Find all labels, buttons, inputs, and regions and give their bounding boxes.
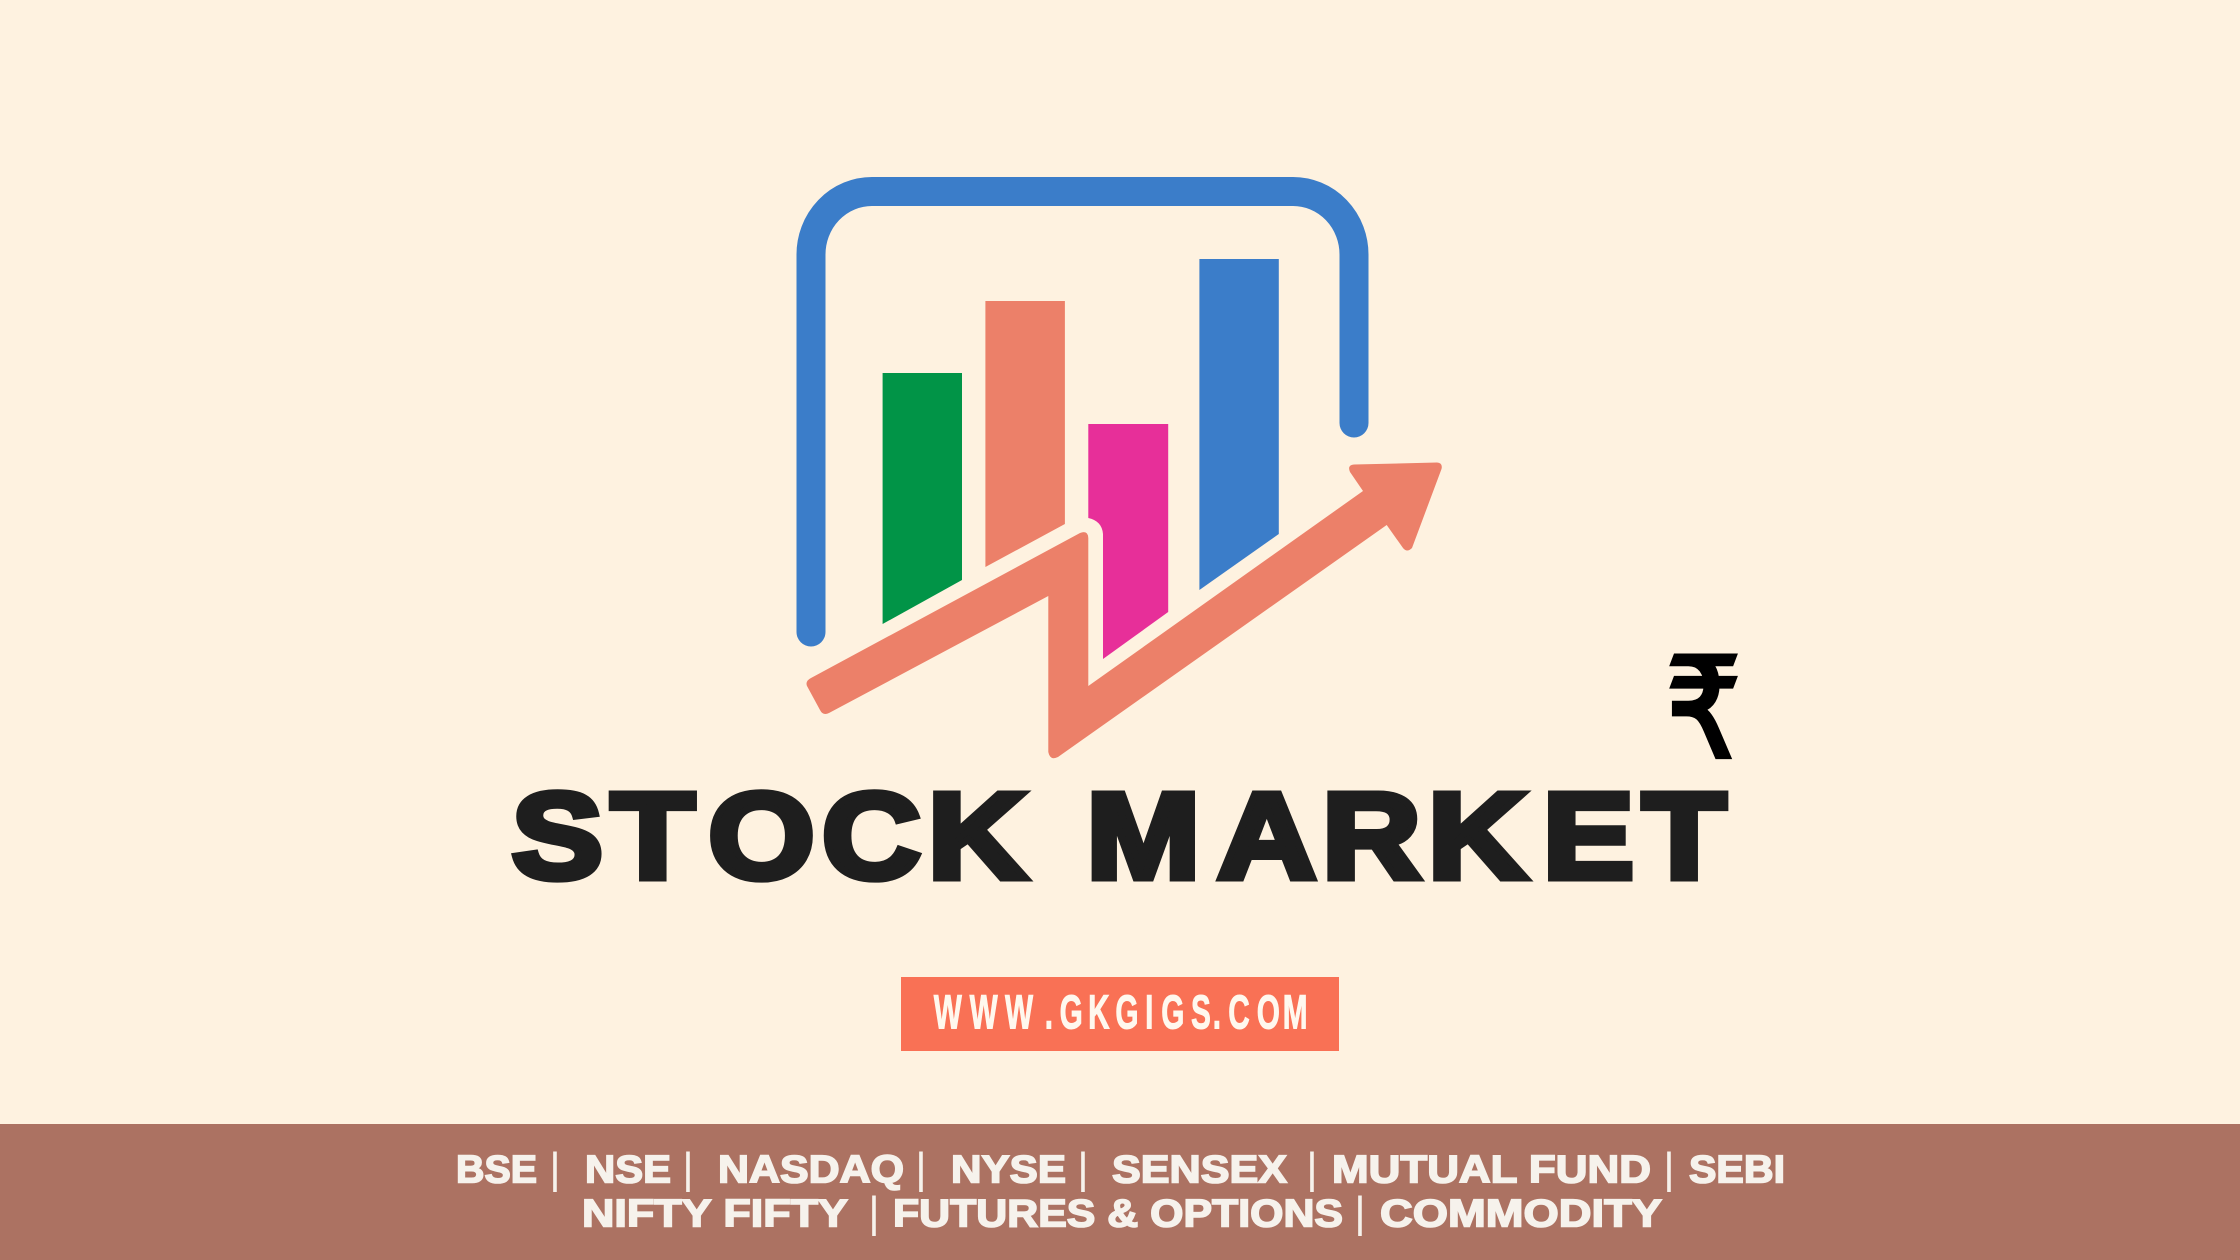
footer keywords line 1: MUTUAL FUND	[1332, 1148, 1651, 1192]
footer band	[0, 1124, 2240, 1260]
footer keywords line 1: BSE	[456, 1148, 537, 1192]
bar: pink	[1088, 424, 1168, 659]
footer keywords line 2: |	[868, 1188, 880, 1237]
footer keywords line 1: NASDAQ	[718, 1148, 904, 1192]
footer keywords line 2: NIFTY FIFTY	[582, 1192, 848, 1236]
footer keywords line 2: COMMODITY	[1380, 1192, 1662, 1236]
frame: rounded blue outline	[811, 191, 1354, 632]
arrow: rising zigzag	[806, 462, 1442, 758]
footer keywords line 2: FUTURES & OPTIONS	[893, 1192, 1343, 1236]
footer keywords line 1: |	[1077, 1144, 1089, 1193]
bar: salmon	[985, 301, 1065, 567]
bar: blue	[1199, 259, 1279, 590]
bar: green	[883, 373, 962, 624]
footer keywords line 1: NYSE	[951, 1148, 1066, 1192]
footer keywords line 1: |	[1306, 1144, 1318, 1193]
footer keywords line 1: |	[915, 1144, 927, 1193]
logo: stock chart	[806, 191, 1442, 758]
title: STOCK MARKET	[512, 769, 1726, 904]
footer keywords line 1: |	[549, 1144, 561, 1193]
footer keywords line 1: SEBI	[1689, 1148, 1785, 1192]
footer keywords line 1: SENSEX	[1112, 1148, 1287, 1192]
icon: rupee symbol: ₹	[1666, 632, 1741, 787]
website badge	[901, 977, 1339, 1051]
footer keywords line 1	[456, 1144, 1785, 1193]
footer keywords line 2: |	[1354, 1188, 1366, 1237]
footer keywords line 1: NSE	[585, 1148, 671, 1192]
footer keywords line 1: |	[1663, 1144, 1675, 1193]
footer keywords line 2	[582, 1188, 1662, 1237]
website text: WWW.GKGIGS.COM	[934, 986, 1308, 1039]
footer keywords line 1: |	[682, 1144, 694, 1193]
